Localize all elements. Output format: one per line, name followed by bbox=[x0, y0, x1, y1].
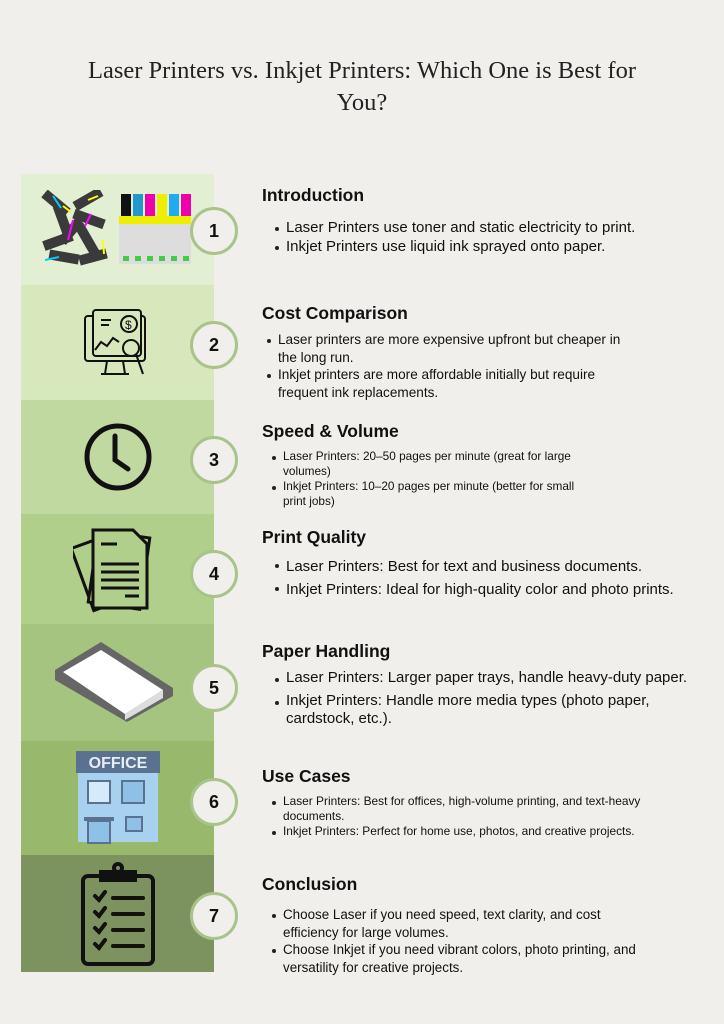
number 2 bbox=[190, 321, 238, 369]
section 3: speed & volume: Laser Printers: 20–50 pages per minute (great for large bbox=[283, 449, 571, 463]
band 6 bbox=[21, 741, 214, 855]
title: Laser Printers vs. Inkjet Printers: Which One is Best for bbox=[88, 57, 636, 84]
band 5 bbox=[21, 624, 214, 741]
section 2: cost comparison: Laser printers are more expensive upfront but cheaper in bbox=[278, 332, 620, 347]
section 3: speed & volume: print jobs) bbox=[283, 494, 335, 508]
section 2: cost comparison: frequent ink replacements. bbox=[278, 384, 438, 400]
section 7: conclusion: efficiency for large volumes. bbox=[283, 924, 449, 940]
section 3: speed & volume: Speed & Volume bbox=[262, 421, 399, 441]
icon: office building: OFFICE bbox=[88, 755, 147, 772]
section 5: paper handling: Paper Handling bbox=[262, 641, 390, 661]
section 4: print quality: Print Quality bbox=[262, 527, 366, 547]
number 4: 4 bbox=[209, 564, 219, 584]
number 7 bbox=[190, 892, 238, 940]
section 2: cost comparison: Cost Comparison bbox=[262, 303, 408, 323]
section 6: use cases bbox=[262, 766, 640, 838]
title: You? bbox=[337, 89, 387, 116]
section 2: cost comparison bbox=[262, 303, 620, 400]
icon: office building bbox=[76, 751, 160, 844]
section 7: conclusion: Choose Inkjet if you need vibrant colors, photo printing, and bbox=[283, 942, 636, 957]
number 1 bbox=[190, 207, 238, 255]
band 3 bbox=[21, 400, 214, 514]
number 2: 2 bbox=[209, 334, 219, 354]
icon: documents bbox=[73, 528, 152, 612]
icon: cartridges bbox=[41, 190, 191, 266]
section 1: introduction: Laser Printers use toner and static electricity to print. bbox=[286, 219, 635, 236]
number 7: 7 bbox=[209, 906, 219, 926]
section 4: print quality: Laser Printers: Best for text and business documents. bbox=[286, 558, 642, 575]
section 7: conclusion: Choose Laser if you need speed, text clarity, and cost bbox=[283, 907, 601, 922]
section 7: conclusion bbox=[262, 874, 636, 975]
icon: clipboard bbox=[81, 862, 155, 966]
section 6: use cases: Laser Printers: Best for offices, high-volume printing, and text-heavy bbox=[283, 794, 640, 808]
number 5: 5 bbox=[209, 678, 219, 698]
section 5: paper handling: cardstock, etc.). bbox=[286, 710, 392, 727]
icon: paper tray bbox=[55, 642, 173, 722]
number 3: 3 bbox=[209, 450, 219, 470]
section 4: print quality: Inkjet Printers: Ideal for high-quality color and photo prints. bbox=[286, 581, 674, 598]
number 6 bbox=[190, 778, 238, 826]
title bbox=[88, 57, 636, 116]
number 5 bbox=[190, 664, 238, 712]
section 7: conclusion: Conclusion bbox=[262, 874, 357, 894]
section 4: print quality bbox=[262, 527, 674, 598]
number 4 bbox=[190, 550, 238, 598]
band 2 bbox=[21, 285, 214, 400]
number 1: 1 bbox=[209, 220, 219, 240]
section 6: use cases: documents. bbox=[283, 809, 344, 823]
section 1: introduction bbox=[262, 185, 635, 255]
icon: monitor chart bbox=[84, 309, 146, 375]
band 1 bbox=[21, 174, 214, 285]
section 1: introduction: Introduction bbox=[262, 185, 364, 205]
section 5: paper handling: Laser Printers: Larger paper trays, handle heavy-duty paper. bbox=[286, 669, 687, 686]
section 6: use cases: Use Cases bbox=[262, 766, 351, 786]
section 3: speed & volume: Inkjet Printers: 10–20 pages per minute (better for small bbox=[283, 479, 574, 493]
section 2: cost comparison: the long run. bbox=[278, 350, 354, 364]
number 3 bbox=[190, 436, 238, 484]
section 5: paper handling: Inkjet Printers: Handle more media types (photo paper, bbox=[286, 692, 650, 708]
band 7 bbox=[21, 855, 214, 972]
section 6: use cases: Inkjet Printers: Perfect for home use, photos, and creative projects. bbox=[283, 824, 635, 838]
section 7: conclusion: versatility for creative projects. bbox=[283, 960, 463, 974]
number 6: 6 bbox=[209, 792, 219, 812]
band 4 bbox=[21, 514, 214, 624]
section 3: speed & volume bbox=[262, 421, 574, 508]
section 5: paper handling bbox=[262, 641, 687, 727]
section 1: introduction: Inkjet Printers use liquid ink sprayed onto paper. bbox=[286, 238, 605, 255]
section 2: cost comparison: Inkjet printers are more affordable initially but require bbox=[278, 367, 595, 382]
icon: monitor chart: $ bbox=[124, 318, 132, 332]
icon: clock bbox=[84, 424, 152, 490]
section 3: speed & volume: volumes) bbox=[283, 464, 331, 478]
